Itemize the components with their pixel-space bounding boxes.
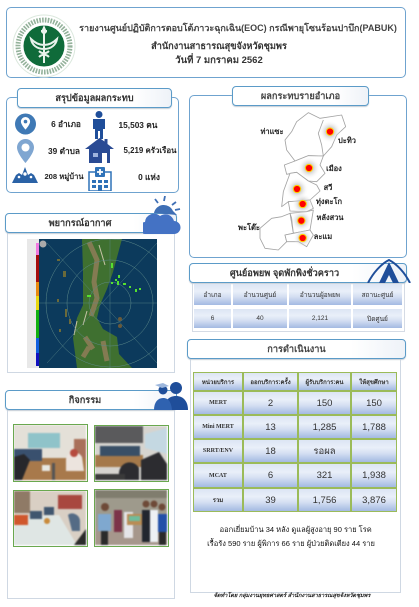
heading: impact by district: ผลกระทบรายอำเภอ [261, 91, 340, 101]
heading: activities: กิจกรรม [69, 395, 101, 405]
text: households: 5,219 ครัวเรือน [124, 146, 176, 155]
table: operations: 1,788 [362, 422, 386, 432]
panel: impact summary [6, 97, 179, 193]
heading: weather forecast [5, 213, 177, 233]
map of Chumphon districts [260, 112, 346, 250]
map label: Phato: พะโต๊ะ [238, 223, 260, 232]
table: operations: 2 [268, 398, 273, 408]
date: วันที่ 7 มกราคม 2562 [175, 55, 263, 66]
heading: impact summary: สรุปข้อมูลผลกระทบ [55, 93, 134, 103]
map label: Lang Suan: หลังสวน [316, 213, 344, 222]
footer credit: จัดทำโดย กลุ่มงานยุทธศาสตร์ สำนักงานสาธารณสุขจังหวัดชุมพร [214, 593, 370, 599]
title text: รายงานศูนย์ปฏิบัติการตอบโต้ภาวะฉุกเฉิน(EOC) กรณีพายุโซนร้อนปาบึก(PABUK) [79, 23, 397, 33]
table: operations [193, 372, 397, 512]
operations summary text [207, 524, 375, 548]
table: operations: 18 [265, 446, 276, 456]
table: operations: 1,756 [313, 494, 336, 506]
panel: weather forecast [7, 232, 175, 373]
operations summary text: เรื้อรัง 590 ราย ผู้พิการ 66 ราย ผู้ป่วยติดเตียง 44 ราย [207, 538, 375, 548]
panel: operations [190, 357, 401, 593]
table: operations: รวม [213, 498, 223, 504]
map label: Sawi: สวี [324, 183, 332, 192]
text: hospitals: 0 แห่ง [138, 172, 160, 182]
table: operations: ให้สุขศึกษา [359, 380, 389, 386]
table: shelters: 40 [256, 315, 264, 322]
heading: weather forecast: พยากรณ์อากาศ [49, 218, 111, 228]
heading: activities [5, 390, 177, 410]
map label: Tha Sae: ท่าแซะ [260, 127, 284, 136]
table: shelters: อำนวนผู้อพยพ [300, 292, 340, 298]
table: operations: MERT [209, 400, 227, 406]
table: operations: 1,285 [313, 422, 336, 432]
text: villages: 208 หมู่บ้าน [44, 172, 84, 181]
table: operations: 150 [366, 398, 382, 408]
heading: impact summary [17, 88, 172, 108]
table: operations: 39 [265, 494, 276, 506]
table: operations: ผู้รับบริการ:คน [306, 380, 343, 386]
table: shelters: อำนวนศูนย์ [244, 292, 276, 298]
map label: Mueang: เมือง [326, 164, 342, 173]
text: districts: 6 อำเภอ [51, 119, 81, 129]
table: operations: SRRT/ENV [203, 448, 233, 454]
icon: public health logo [12, 14, 76, 78]
table: operations: MCAT [209, 472, 227, 478]
photo: meeting room two [94, 425, 169, 482]
table: shelters: ปิดศูนย์ [367, 316, 388, 322]
table: shelters [194, 284, 402, 328]
panel: activities [7, 408, 175, 599]
table: operations: หน่วยบริการ [202, 380, 234, 386]
radar image [27, 239, 157, 368]
heading: operations: การดำเนินงาน [267, 344, 326, 354]
panel: shelter table background [192, 282, 405, 332]
table: operations: 13 [265, 422, 276, 432]
icon: tent [367, 259, 411, 283]
heading: temporary shelters: ศูนย์อพยพ จุดพักพิงชั่วคราว [230, 268, 339, 278]
header panel [6, 7, 406, 78]
icon: hospital [88, 167, 112, 191]
table: shelters: อำเภอ [204, 292, 221, 298]
icon: light location pin [17, 139, 34, 163]
table: shelters: 2,121 [312, 315, 328, 322]
text: subdistricts: 39 ตำบล [48, 146, 80, 156]
heading: temporary shelters [189, 263, 407, 283]
icon: sun and cloud [143, 196, 180, 234]
table: operations: รอผล [313, 446, 336, 456]
table: operations: ออกบริการ:ครั้ง [250, 380, 291, 386]
table: operations: Mini MERT [202, 424, 234, 430]
icon: person [93, 111, 105, 139]
photo: meeting room one [13, 424, 88, 482]
photo: meeting table [13, 490, 88, 547]
table: operations: 3,876 [362, 494, 386, 506]
table: operations: 321 [317, 470, 332, 481]
map label: Lamae: ละแม [314, 232, 332, 241]
map label: Thung Tako: ทุ่งตะโก [316, 197, 342, 206]
table: operations: 150 [317, 398, 332, 408]
operations summary text: ออกเยี่ยมบ้าน 34 หลัง ดูแลผู้สูงอายุ 90 ราย โรค [220, 525, 372, 534]
icon: village [12, 167, 38, 183]
heading: impact by district [232, 86, 369, 106]
subtitle: สำนักงานสาธารณสุขจังหวัดชุมพร [151, 41, 287, 51]
text: people: 15,503 คน [119, 120, 157, 130]
table: operations: 6 [268, 470, 273, 481]
table: shelters: 6 [211, 315, 214, 322]
table: shelters: สถานะศูนย์ [362, 292, 393, 298]
panel: impact by district [189, 95, 407, 258]
heading: operations [187, 339, 406, 359]
map label: Pathio: ปะทิว [338, 136, 356, 145]
icon: house [85, 138, 114, 163]
icon: medical staff [154, 382, 188, 410]
photo: group holding donation box [94, 489, 169, 547]
icon: blue location pin [15, 114, 36, 134]
table: operations: 1,938 [362, 470, 386, 481]
district markers [286, 120, 341, 247]
